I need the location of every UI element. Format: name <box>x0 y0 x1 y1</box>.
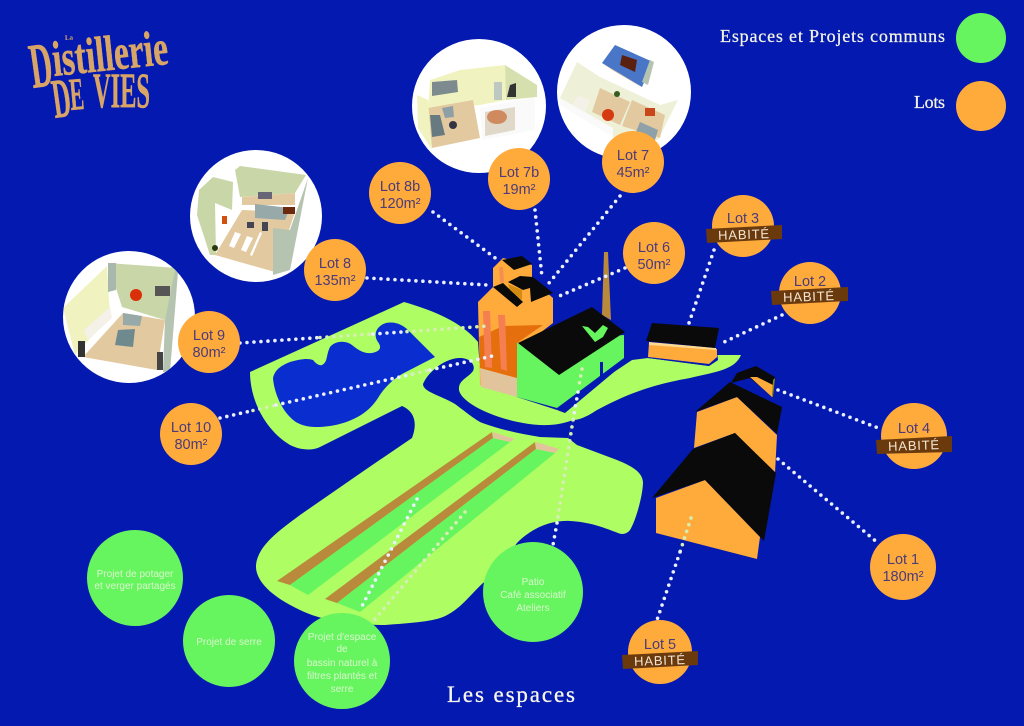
callout: Lot 7b: Lot 7b <box>499 165 539 181</box>
callout: Lot 9 <box>178 311 240 373</box>
callout: Lot 10: Lot 10 <box>171 420 211 436</box>
chimney <box>602 252 611 320</box>
project: bassin naturel: Projet d'espace <box>308 632 377 643</box>
callout: Lot 8b: 120m² <box>379 196 421 212</box>
callout: Lot 1 <box>870 534 936 600</box>
project: bassin naturel: serre <box>331 684 354 695</box>
garden strips <box>277 432 559 612</box>
legend: lots <box>914 81 1006 131</box>
callout: Lot 10: 80m² <box>174 437 208 453</box>
logo: La Distillerie de Vies: E <box>67 68 86 120</box>
river <box>423 358 573 438</box>
project: bassin naturel <box>294 613 390 709</box>
room view: lot 7b <box>412 39 546 173</box>
callout: Lot 8: 135m² <box>314 273 356 289</box>
callout: Lot 8b: Lot 8b <box>380 179 420 195</box>
callout: Lot 1: Lot 1 <box>887 552 919 568</box>
project: bassin naturel: bassin naturel à <box>307 658 378 669</box>
callout: Lot 4 habité: HABITÉ <box>888 437 940 454</box>
room view: lot 8 <box>190 150 322 282</box>
callout: Lot 9: 80m² <box>192 345 226 361</box>
project: bassin naturel: filtres plantés et <box>307 671 377 682</box>
project: potager et verger: et verger partagés <box>94 581 176 592</box>
callout: Lot 2 habité: Lot 2 <box>794 274 826 290</box>
logo: La Distillerie de Vies: VIES <box>93 62 150 118</box>
callout: Lot 5 habité <box>622 620 698 684</box>
site plan: land, pond and river <box>250 302 741 625</box>
callout: Lot 3 habité: HABITÉ <box>718 226 770 243</box>
callout: Lot 7: Lot 7 <box>617 148 649 164</box>
callout: Lot 6: 50m² <box>637 257 671 273</box>
callout: Lot 4 habité <box>876 403 952 469</box>
callout: Lot 8 <box>304 239 366 301</box>
title: les espaces: Les espaces <box>447 682 575 707</box>
callout: Lot 1: 180m² <box>882 569 924 585</box>
legend: lots: Lots <box>914 92 945 112</box>
callout: Lot 7b: 19m² <box>502 182 536 198</box>
callout: Lot 6: Lot 6 <box>638 240 670 256</box>
project: serre <box>183 595 275 687</box>
logo: La Distillerie de Vies: La <box>65 34 74 42</box>
callout: Lot 7b <box>488 148 550 210</box>
callout: Lot 4 habité: Lot 4 <box>898 421 930 437</box>
callout: Lot 9: Lot 9 <box>193 328 225 344</box>
land <box>250 302 741 625</box>
room view: lot 7 <box>557 25 691 159</box>
callout: Lot 8b <box>369 162 431 224</box>
project: potager et verger <box>87 530 183 626</box>
callout: Lot 6 <box>623 222 685 284</box>
pond <box>273 322 435 427</box>
callout: Lot 7 <box>602 131 664 193</box>
project: patio, café, ateliers: Café associatif <box>500 590 566 601</box>
callout: Lot 2 habité: HABITÉ <box>783 288 835 305</box>
project: patio, café, ateliers: Patio <box>522 577 545 588</box>
callout: Lot 7: 45m² <box>616 165 650 181</box>
callout: Lot 10 <box>160 403 222 465</box>
project: patio, café, ateliers <box>483 542 583 642</box>
callout: Lot 5 habité: Lot 5 <box>644 637 676 653</box>
project: potager et verger: Projet de potager <box>97 569 174 580</box>
small building: lots 2 and 3 <box>646 323 719 366</box>
room view: lot 9 <box>63 251 195 383</box>
callout: Lot 2 habité <box>771 262 848 324</box>
logo: La Distillerie de Vies: D <box>48 67 75 131</box>
callout: Lot 3 habité <box>706 195 782 257</box>
main distillery tower <box>478 256 553 397</box>
callout: Lot 8: Lot 8 <box>319 256 351 272</box>
legend: espaces et projets communs: Espaces et Projets communs <box>720 26 945 46</box>
project: serre: Projet de serre <box>196 637 262 648</box>
logo: La Distillerie de Vies: istillerie <box>49 19 171 87</box>
logo: La Distillerie de Vies: D <box>25 28 57 102</box>
dotted connector lines <box>220 196 881 625</box>
logo: La Distillerie de Vies <box>25 19 171 131</box>
project: patio, café, ateliers: Ateliers <box>516 603 550 614</box>
project: bassin naturel: de <box>336 644 348 655</box>
callout: Lot 3 habité: Lot 3 <box>727 211 759 227</box>
callout: Lot 5 habité: HABITÉ <box>634 652 686 669</box>
green building: patio and workshops <box>517 307 626 413</box>
legend: espaces et projets communs <box>720 13 1006 63</box>
long building: lots 1, 4 and 5 <box>652 366 782 559</box>
